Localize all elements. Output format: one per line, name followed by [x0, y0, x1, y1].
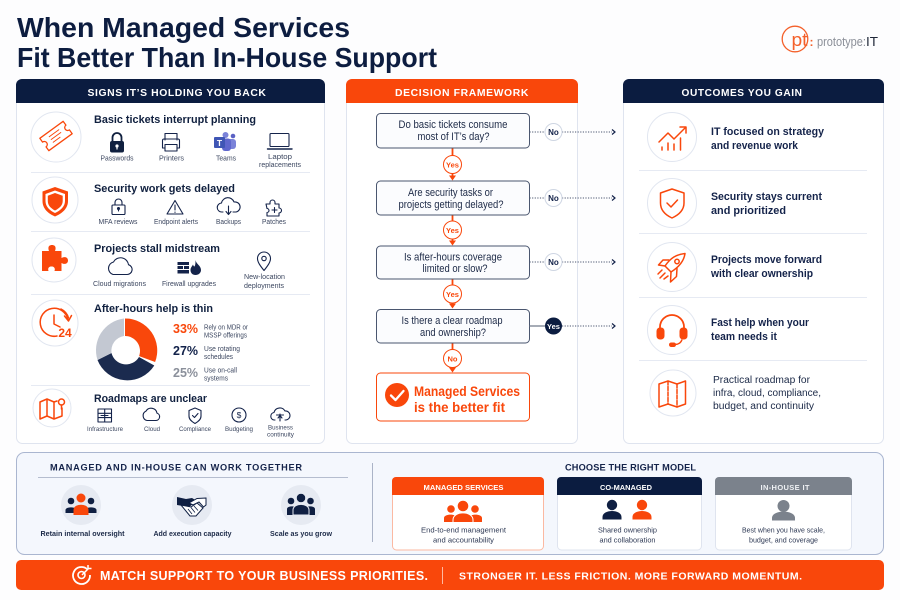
stat: 33%: MSSP offerings: [204, 332, 247, 340]
question box 4: Is there a clear roadmap: [402, 315, 502, 327]
question box 4: and ownership?: [420, 327, 486, 339]
icon: infrastructure: [98, 409, 112, 422]
icon: compliance shield: [189, 408, 201, 424]
panel: signs it's holding you back: [16, 79, 325, 444]
question box 3: Is after-hours coverage: [404, 252, 502, 264]
panel: outcomes you gain: [623, 79, 884, 444]
icon: mfa lock: [112, 199, 125, 214]
card: managed services: [392, 477, 544, 550]
connector: yes 3: Yes: [446, 290, 459, 299]
icon: cloud small: [143, 408, 160, 420]
icon: padlock: [110, 133, 124, 152]
logo: prototype:IT: prototype:: [817, 35, 866, 49]
title: Fit Better Than In-House Support: [17, 42, 437, 73]
row: roadmaps unclear: Business: [268, 424, 294, 432]
branch: yes: [530, 318, 615, 334]
icon: headset: [656, 315, 688, 347]
row: basic tickets: Basic tickets interrupt planning: [94, 114, 256, 126]
connector: yes 2: Yes: [446, 226, 459, 235]
stat: 27%: 27%: [173, 343, 198, 358]
result: managed services: Managed Services: [414, 384, 520, 399]
outcome: projects: with clear ownership: [710, 268, 814, 280]
outcome: roadmap: infra, cloud, compliance,: [713, 388, 821, 399]
row: basic tickets: Passwords: [100, 156, 134, 162]
stat: 33%: [173, 321, 249, 340]
stat: 25%: [173, 365, 237, 382]
row: roadmaps unclear: Compliance: [179, 426, 211, 433]
row: basic tickets: Laptop: [268, 154, 292, 161]
icon: laptop: [268, 134, 292, 149]
question box 2: [376, 181, 530, 215]
row: roadmaps unclear: Cloud: [144, 426, 160, 433]
icon: handshake: [177, 497, 206, 516]
card: managed services: End-to-end management: [421, 526, 506, 534]
card: in-house it: budget, and coverage: [749, 536, 818, 544]
chart: donut: [96, 318, 157, 380]
result: managed services: is the better fit: [414, 400, 505, 415]
connector: yes 1: [444, 148, 462, 180]
outcome: roadmap: [650, 370, 821, 416]
question box 2: projects getting delayed?: [398, 199, 504, 211]
question box 1: most of IT’s day?: [418, 131, 490, 143]
icon: continuity cloud: [271, 408, 290, 421]
outcome: fast help: team needs it: [711, 331, 777, 343]
item: execution capacity: Add execution capacity: [154, 529, 232, 538]
card: co-managed: CO-MANAGED: [600, 483, 653, 492]
icon: growth chart: [659, 127, 686, 150]
card: in-house it: [715, 477, 852, 550]
branch: no 1: No: [548, 128, 559, 137]
branch: no 3: No: [548, 258, 559, 267]
outcome: strategy: IT focused on strategy: [711, 126, 824, 138]
question box 1: Do basic tickets consume: [398, 119, 508, 131]
icon: teams: T: [217, 138, 223, 148]
logo: prototype:IT: [782, 26, 878, 52]
panel: decision framework: [346, 79, 578, 444]
item: retain oversight: Retain internal oversight: [40, 529, 125, 538]
outcome: fast help: Fast help when your: [711, 317, 809, 329]
stat: 27%: Use rotating: [204, 346, 240, 353]
connector: yes 2: [444, 215, 462, 246]
icon: 24-hour clock: 24: [58, 326, 72, 340]
row: basic tickets: Teams: [216, 156, 236, 162]
icon: shield check: [660, 189, 684, 218]
icon: dollar: $: [237, 410, 242, 420]
branch: no 3: [530, 254, 615, 270]
icon: puzzle piece: [42, 245, 68, 271]
icon: dollar: [232, 408, 246, 422]
outcome: roadmap: Practical roadmap for: [713, 375, 811, 386]
banner: MATCH SUPPORT TO YOUR BUSINESS PRIORITIES.: [100, 569, 428, 583]
stat: 25%: 25%: [173, 365, 198, 380]
row: roadmaps unclear: continuity: [267, 432, 295, 438]
item: scale: Scale as you grow: [270, 529, 332, 538]
connector: no to result: No: [448, 354, 458, 363]
logo: prototype:IT: IT: [866, 35, 878, 49]
icon: two people: [602, 500, 652, 520]
row: security work: Endpoint alerts: [154, 219, 198, 226]
icon: firewall: [178, 260, 201, 275]
outcome: roadmap: budget, and continuity: [713, 401, 814, 412]
question box 3: limited or slow?: [422, 263, 488, 275]
card: managed services: MANAGED SERVICES: [424, 483, 504, 492]
icon: managed team: [444, 501, 482, 522]
outcome: strategy: [648, 112, 824, 162]
row: basic tickets: [31, 112, 301, 169]
card: co-managed: Shared ownership: [598, 526, 657, 534]
row: security work: MFA reviews: [98, 219, 138, 226]
icon: team with lead: [66, 494, 96, 515]
icon: check: [385, 383, 409, 407]
icon: backup cloud: [217, 198, 240, 214]
row: projects stall: New-location: [244, 274, 285, 281]
row: security work: Security work gets delayed: [94, 183, 235, 195]
row: security work: [32, 177, 286, 226]
icon: cloud: [109, 258, 132, 275]
icon: team: [287, 494, 315, 515]
icon: shield: [42, 187, 68, 216]
heading: decision framework: DECISION FRAMEWORK: [395, 87, 529, 99]
question box 2: Are security tasks or: [408, 187, 493, 199]
branch: yes: Yes: [547, 322, 560, 331]
outcome: projects: Projects move forward: [711, 254, 822, 266]
connector: yes 3: [444, 279, 462, 308]
banner: [16, 560, 884, 590]
title: [17, 12, 437, 73]
question box 4: [376, 310, 530, 343]
card: co-managed: [557, 477, 702, 550]
icon: location pin: [258, 252, 270, 270]
stat: 33%: Rely on MDR or: [204, 324, 249, 332]
heading: signs: SIGNS IT’S HOLDING YOU BACK: [88, 87, 266, 99]
row: projects stall: Projects stall midstream: [94, 243, 220, 255]
connector: yes 1: Yes: [446, 160, 459, 169]
card: co-managed: and collaboration: [600, 536, 656, 544]
outcome: security: Security stays current: [711, 191, 822, 203]
card: managed services: and accountability: [433, 536, 494, 544]
card: in-house it: IN-HOUSE IT: [760, 483, 810, 492]
result: managed services: [376, 373, 530, 421]
row: security work: Patches: [262, 219, 286, 226]
row: after-hours help: After-hours help is thin: [94, 303, 213, 315]
outcome: projects: [648, 242, 822, 292]
heading: outcomes: OUTCOMES YOU GAIN: [682, 87, 802, 99]
outcome: security: [648, 178, 822, 228]
branch: no 1: [530, 124, 615, 140]
stat: 33%: 33%: [173, 321, 198, 336]
branch: no 2: No: [548, 194, 559, 203]
item: execution capacity: [154, 485, 232, 538]
outcome: strategy: and revenue work: [711, 140, 798, 152]
stat: 25%: systems: [204, 376, 228, 382]
icon: rocket: [658, 254, 685, 282]
banner: STRONGER IT. LESS FRICTION. MORE FORWARD MOMENTUM.: [459, 570, 802, 582]
outcome: fast help: [648, 306, 809, 354]
logo: prototype:IT: pt: [792, 30, 808, 50]
card: in-house it: Best when you have scale,: [742, 526, 825, 534]
icon: map with pin: [40, 399, 64, 419]
row: projects stall: [32, 238, 285, 290]
row: roadmaps unclear: Infrastructure: [87, 426, 123, 433]
logo: prototype:IT: :: [810, 35, 814, 49]
title: When Managed Services: [17, 12, 350, 43]
panel: bottom strip: [16, 452, 884, 554]
stat: 27%: schedules: [204, 354, 233, 361]
row: projects stall: Cloud migrations: [93, 281, 146, 288]
icon: folded map: [659, 381, 686, 407]
question box 1: [376, 114, 530, 148]
row: projects stall: deployments: [244, 283, 284, 290]
row: roadmaps unclear: Budgeting: [225, 426, 253, 433]
branch: no 2: [530, 190, 615, 206]
row: basic tickets: Printers: [159, 156, 185, 162]
icon: person: [772, 500, 795, 520]
heading: choose the right model: CHOOSE THE RIGHT MODEL: [565, 462, 696, 472]
question box 3: [376, 246, 530, 279]
row: basic tickets: replacements: [259, 162, 301, 169]
connector: no to result: [444, 343, 462, 372]
icon: teams: [214, 132, 236, 151]
stat: 25%: Use on-call: [204, 368, 237, 374]
stat: 27%: [173, 343, 240, 361]
row: security work: Backups: [216, 219, 241, 226]
item: scale: [270, 485, 332, 538]
icon: 24-hour clock: [40, 308, 72, 340]
icon: alert triangle: [167, 200, 183, 214]
row: after-hours help: [32, 300, 249, 382]
row: roadmaps unclear: Roadmaps are unclear: [94, 393, 208, 405]
row: roadmaps unclear: [33, 389, 295, 438]
icon: patches: [266, 200, 282, 216]
icon: target: [73, 565, 92, 584]
item: retain oversight: [40, 485, 125, 538]
row: projects stall: Firewall upgrades: [162, 281, 216, 288]
icon: printer: [162, 134, 180, 151]
icon: ticket: [40, 121, 72, 151]
outcome: security: and prioritized: [711, 205, 786, 217]
heading: work together: MANAGED AND IN-HOUSE CAN WORK TOGETHER: [50, 462, 302, 472]
